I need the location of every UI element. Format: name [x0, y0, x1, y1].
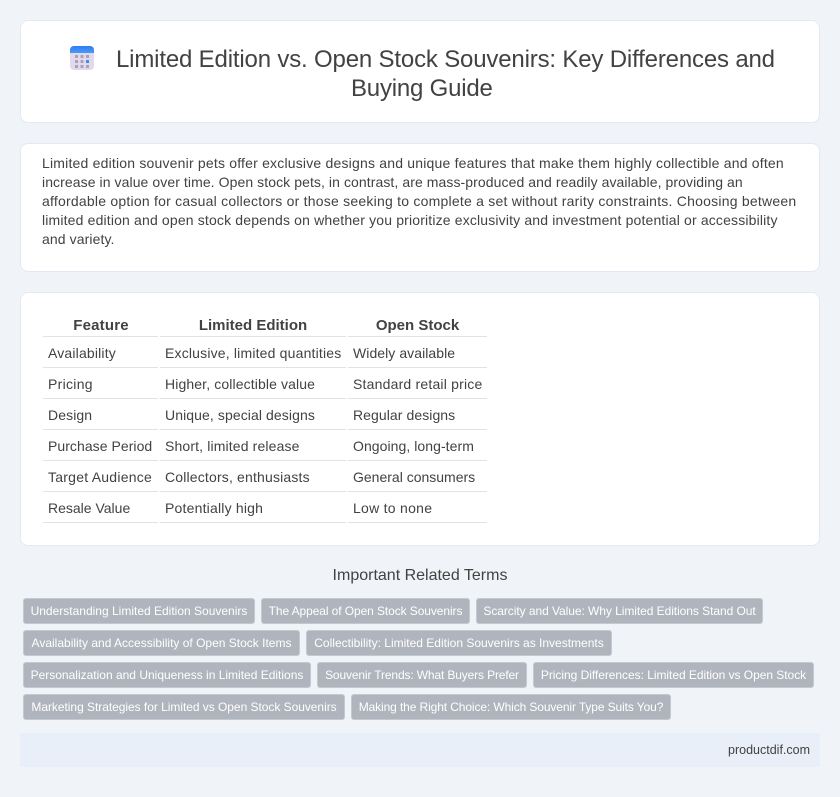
- intro paragraph: limited edition and open stock depends on whether you prioritize exclusivity and investment potential or accessibility: [42, 212, 778, 228]
- comparison table: Target Audience: [48, 469, 152, 485]
- related terms tags: Pricing Differences: Limited Edition vs Open Stock: [541, 668, 806, 682]
- related terms heading: Important Related Terms: [333, 567, 507, 584]
- comparison table: Short, limited release: [165, 438, 300, 454]
- intro paragraph: affordable option for casual collectors or those seeking to complete a set without rarity constraints. Choosing between: [42, 193, 796, 209]
- related terms tags: Making the Right Choice: Which Souvenir Type Suits You?: [359, 700, 663, 714]
- intro paragraph: and variety.: [42, 231, 115, 247]
- comparison table: Low to none: [353, 500, 432, 516]
- related terms tags: Souvenir Trends: What Buyers Prefer: [325, 668, 519, 682]
- comparison table: Availability: [48, 345, 116, 361]
- footer site name: productdif.com: [728, 743, 810, 757]
- related terms tags: Understanding Limited Edition Souvenirs: [31, 604, 247, 618]
- comparison table: General consumers: [353, 469, 475, 485]
- comparison table: Purchase Period: [48, 438, 152, 454]
- comparison table: Exclusive, limited quantities: [165, 345, 341, 361]
- related terms tags: The Appeal of Open Stock Souvenirs: [269, 604, 462, 618]
- comparison table: Resale Value: [48, 500, 130, 516]
- comparison table panel: [20, 292, 820, 546]
- related terms tags: Collectibility: Limited Edition Souvenirs as Investments: [314, 636, 604, 650]
- comparison table: Higher, collectible value: [165, 376, 315, 392]
- comparison table: Design: [48, 407, 92, 423]
- comparison table: Standard retail price: [353, 376, 482, 392]
- comparison table: Potentially high: [165, 500, 263, 516]
- footer bar: [20, 733, 820, 767]
- related terms tags: Personalization and Uniqueness in Limited Editions: [31, 668, 303, 682]
- comparison table: Feature: [73, 317, 129, 334]
- comparison table: Open Stock: [376, 317, 459, 334]
- comparison table: Collectors, enthusiasts: [165, 469, 310, 485]
- comparison table: Unique, special designs: [165, 407, 315, 423]
- related terms tags: Scarcity and Value: Why Limited Editions Stand Out: [483, 604, 756, 618]
- icon: calendar: [70, 46, 94, 70]
- intro paragraph: increase in value over time. Open stock pets, in contrast, are mass-produced and readily available, providing an: [42, 174, 743, 190]
- related terms tags: Availability and Accessibility of Open Stock Items: [32, 636, 291, 650]
- intro paragraph: [42, 155, 796, 247]
- comparison table: [43, 317, 487, 523]
- comparison table: Limited Edition: [199, 317, 307, 334]
- related terms tags: Marketing Strategies for Limited vs Open Stock Souvenirs: [31, 700, 337, 714]
- comparison table: Regular designs: [353, 407, 455, 423]
- header panel: Limited Edition vs. Open Stock Souvenirs: Key Differences and: [116, 46, 775, 73]
- header panel: Buying Guide: [351, 75, 493, 102]
- comparison table: Widely available: [353, 345, 455, 361]
- title: [116, 46, 775, 102]
- intro paragraph: Limited edition souvenir pets offer exclusive designs and unique features that make them highly collectible and often: [42, 155, 784, 171]
- header panel: [20, 20, 820, 123]
- related terms tags: [23, 598, 814, 720]
- comparison table: Pricing: [48, 376, 93, 392]
- comparison table: Ongoing, long-term: [353, 438, 474, 454]
- intro text panel: [20, 143, 820, 272]
